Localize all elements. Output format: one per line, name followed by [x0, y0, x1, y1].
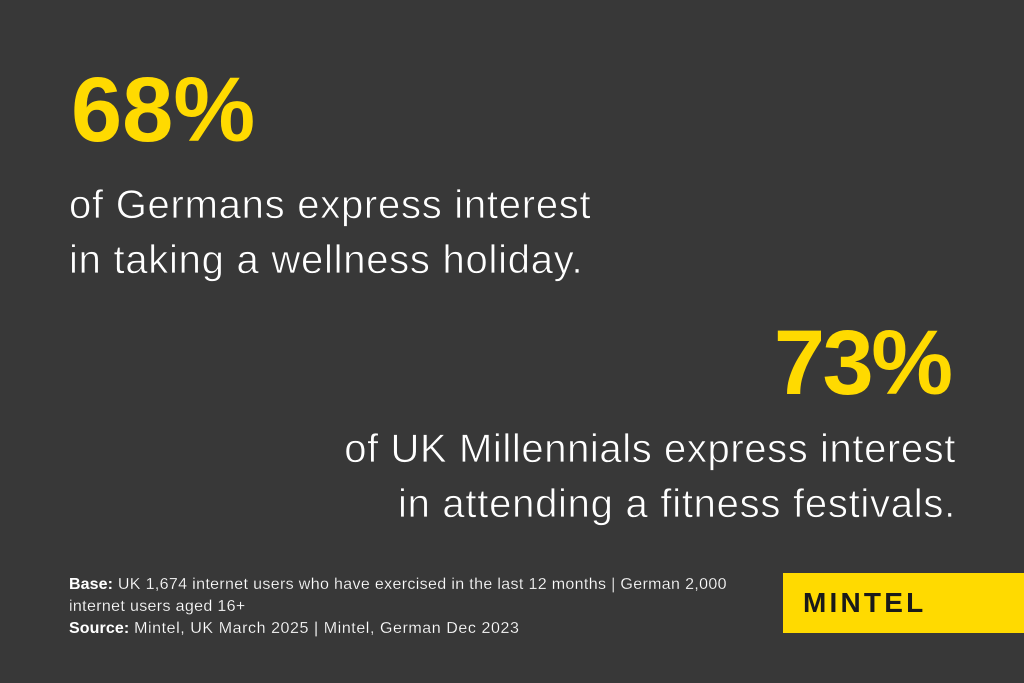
text: Germans wellness holiday: of Germans express interest	[69, 182, 591, 226]
footnote: base and source	[69, 576, 727, 637]
footnote: base and source: Base: UK 1,674 internet users who have exercised in the last 12 months | German 2,000	[69, 576, 727, 593]
text: UK Millennials fitness festivals: in attending a fitness festivals.	[398, 482, 956, 526]
text: Germans wellness holiday: in taking a wellness holiday.	[69, 238, 583, 282]
logo: Mintel	[783, 573, 1024, 633]
stat: 68%: 68%	[71, 59, 255, 161]
footnote: base and source: Source: Mintel, UK March 2025 | Mintel, German Dec 2023	[69, 620, 519, 637]
stat: 73%: 73%	[774, 312, 953, 414]
footnote: base and source: internet users aged 16+	[69, 598, 246, 615]
text: UK Millennials fitness festivals: of UK Millennials express interest	[344, 426, 956, 470]
text: UK Millennials fitness festivals	[344, 426, 956, 526]
text: Germans wellness holiday	[69, 182, 591, 282]
logo: Mintel: MINTEL	[803, 587, 926, 618]
